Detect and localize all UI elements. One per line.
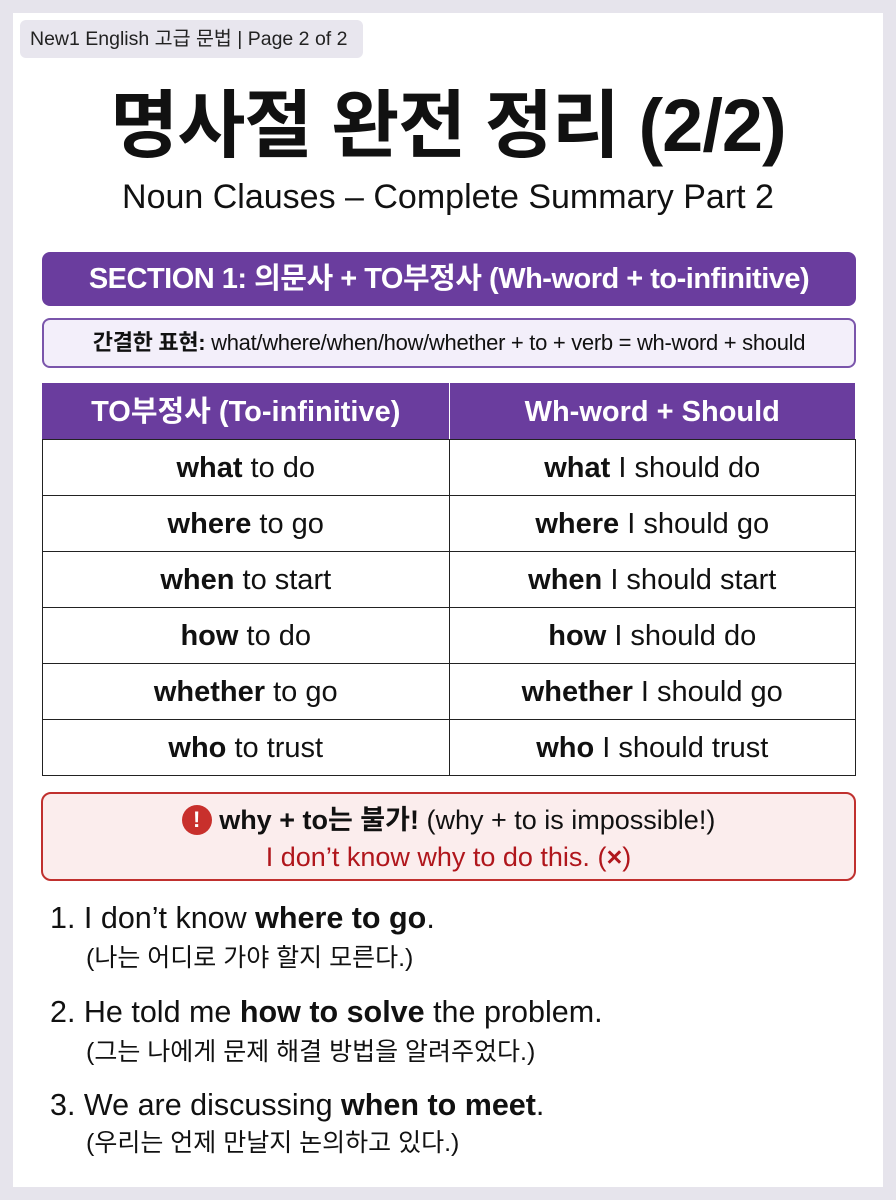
text: (우리는 언제 만날지 논의하고 있다.) [86, 1129, 459, 1157]
warning callout: why + to는 불가! (why + to is impossible!) [219, 805, 715, 835]
comparison table: who I should trust [536, 732, 768, 764]
icon: exclamation [182, 805, 212, 835]
comparison table [42, 383, 856, 776]
text: (그는 나에게 문제 해결 방법을 알려주었다.) [86, 1038, 535, 1066]
comparison table: where to go [168, 508, 324, 540]
header tag: New1 English 고급 문법 | Page 2 of 2 [30, 28, 347, 50]
comparison table: where I should go [535, 508, 769, 540]
icon: exclamation: ! [193, 807, 200, 832]
example 2: 2. He told me how to solve the problem. [50, 995, 603, 1029]
warning callout [41, 792, 856, 881]
example 1: 1. I don’t know where to go. [50, 901, 435, 935]
comparison table: whether to go [154, 676, 338, 708]
comparison table: who to trust [168, 732, 323, 764]
header tag [20, 20, 363, 58]
subtitle: Noun Clauses – Complete Summary Part 2 [122, 178, 774, 216]
comparison table: what to do [176, 452, 315, 484]
title: 명사절 완전 정리 (2/2) [110, 84, 786, 167]
comparison table: Wh-word + Should [525, 396, 780, 428]
comparison table: how to do [180, 620, 311, 652]
note box [42, 318, 856, 368]
comparison table: what I should do [544, 452, 760, 484]
comparison table: how I should do [548, 620, 756, 652]
note box: 간결한 표현: what/where/when/how/whether + to + verb = wh-word + should [93, 330, 805, 355]
example 3: 3. We are discussing when to meet. [50, 1088, 544, 1122]
comparison table: TO부정사 (To-infinitive) [91, 396, 400, 428]
warning callout: I don’t know why to do this. (×) [266, 842, 631, 872]
comparison table: when I should start [528, 564, 776, 596]
comparison table: when to start [160, 564, 331, 596]
section heading [42, 252, 856, 306]
text: (나는 어디로 가야 할지 모른다.) [86, 944, 413, 972]
section heading: SECTION 1: 의문사 + TO부정사 (Wh-word + to-infinitive) [89, 263, 809, 295]
comparison table: whether I should go [522, 676, 783, 708]
